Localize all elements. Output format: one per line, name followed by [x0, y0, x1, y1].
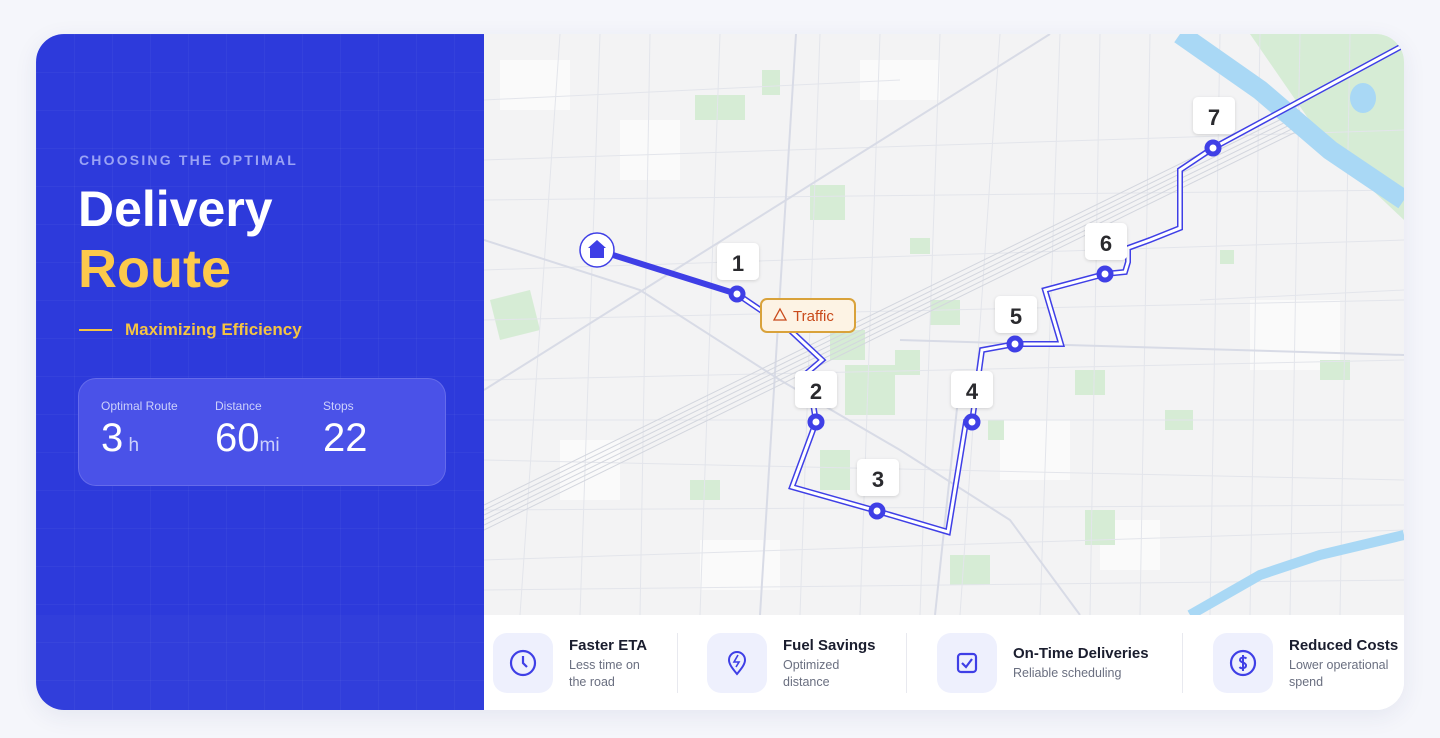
stat: distance: 60mi [215, 416, 280, 460]
stat: optimal route: Optimal Route [101, 399, 178, 413]
stop labels: 3 [872, 467, 884, 492]
feature: faster ETA: the road [569, 675, 615, 689]
stop labels: 5 [1010, 304, 1022, 329]
roads [484, 34, 1404, 615]
stop labels: 6 [1100, 231, 1112, 256]
feature: faster ETA [493, 633, 647, 693]
feature: fuel savings [707, 633, 876, 693]
icon: home marker [580, 233, 614, 267]
stat: stops: 22 [323, 416, 368, 460]
stat: stops: Stops [323, 399, 354, 413]
stop labels: 7 [1208, 105, 1220, 130]
stop labels: 1 [732, 251, 744, 276]
feature: reduced costs: Lower operational [1289, 658, 1388, 672]
subtitle: Maximizing Efficiency [125, 320, 302, 339]
traffic callout [761, 299, 855, 332]
feature: fuel savings: Optimized [783, 658, 839, 672]
kicker: CHOOSING THE OPTIMAL [79, 152, 298, 168]
stat: distance: Distance [215, 399, 262, 413]
rivers [1180, 34, 1404, 200]
traffic callout: Traffic [793, 308, 834, 325]
feature: reduced costs [1213, 633, 1398, 693]
feature: reduced costs: Reduced Costs [1289, 637, 1398, 654]
map [484, 34, 1404, 615]
stop labels: 4 [966, 379, 979, 404]
route [597, 45, 1404, 532]
feature: reduced costs: spend [1289, 675, 1323, 689]
feature: on-time deliveries: Reliable scheduling [1013, 666, 1121, 680]
bottom features [484, 615, 1404, 710]
panel: left title [36, 34, 484, 710]
stop labels [717, 97, 1235, 496]
stats box [78, 378, 446, 486]
railway [484, 105, 1300, 530]
feature: on-time deliveries: On-Time Deliveries [1013, 645, 1149, 662]
title line 1: Delivery [78, 181, 273, 237]
feature: faster ETA: Less time on [569, 658, 640, 672]
feature: fuel savings: distance [783, 675, 830, 689]
stat: optimal route [101, 399, 178, 460]
title line 2: Route [78, 239, 231, 299]
feature: fuel savings: Fuel Savings [783, 637, 876, 654]
stat: optimal route: 3 h [101, 416, 139, 460]
green areas [490, 34, 1404, 585]
stop labels: 2 [810, 379, 822, 404]
stop markers [731, 142, 1219, 517]
feature: on-time deliveries [937, 633, 1149, 693]
feature: faster ETA: Faster ETA [569, 637, 647, 654]
